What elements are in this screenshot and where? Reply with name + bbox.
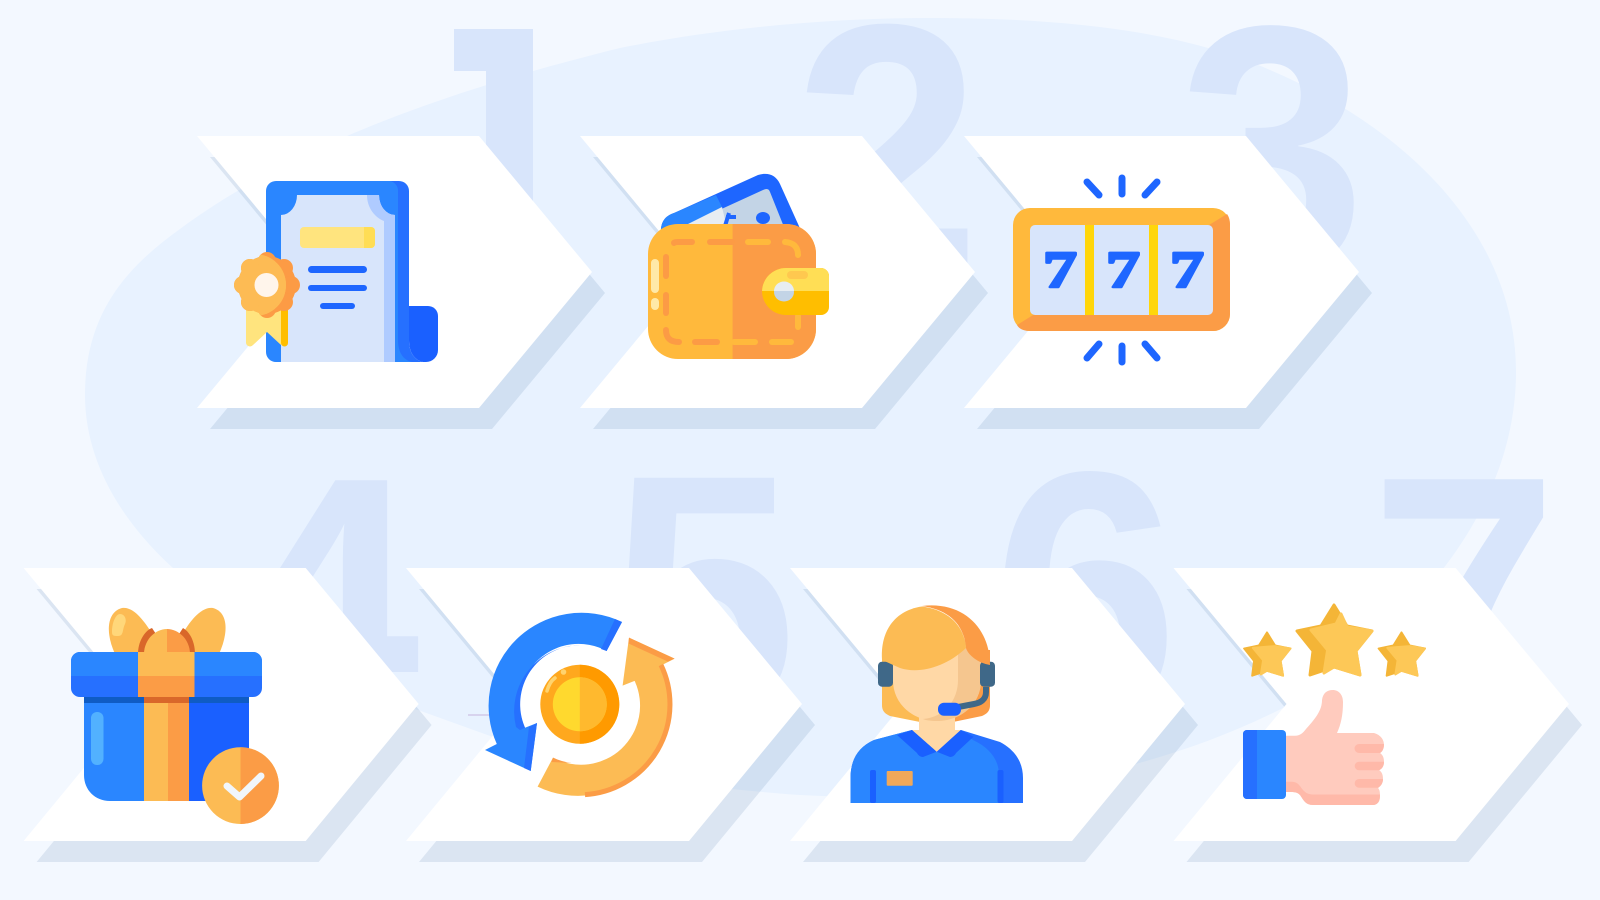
panel: step 6 support agent	[790, 568, 1198, 862]
reel 2: 7	[1106, 242, 1140, 299]
chevron	[580, 136, 975, 408]
panel: step 1 certificate	[197, 136, 605, 429]
chevron shadow	[977, 157, 1372, 429]
icon: certificate	[234, 181, 438, 362]
chevron shadow	[37, 589, 432, 862]
number 1	[454, 29, 533, 200]
chevron	[406, 568, 802, 841]
icon: support agent	[850, 605, 1023, 803]
chevron shadow	[803, 589, 1198, 862]
icon: 777 slot machine	[1013, 178, 1230, 362]
icon: three stars and thumbs up	[1243, 605, 1425, 805]
reel 1: 7	[1043, 242, 1077, 299]
small star right	[1379, 632, 1425, 676]
panel: step 2 wallet	[580, 136, 988, 429]
icon: gift box	[71, 608, 279, 824]
panel: step 7 rating	[1174, 568, 1582, 862]
background blob	[85, 18, 1516, 797]
chevron shadow	[593, 157, 988, 429]
chevron	[24, 568, 419, 841]
panel: step 4 gift	[24, 568, 432, 862]
chevron	[197, 136, 592, 408]
number 4: 4	[232, 405, 422, 795]
chevron	[1174, 568, 1569, 841]
chevron shadow	[419, 589, 815, 862]
panel: step 5 coin cycle	[406, 568, 815, 862]
big star	[1297, 605, 1372, 675]
number 5: 5	[609, 402, 797, 793]
small star left	[1244, 632, 1291, 676]
number 6: 6	[991, 399, 1179, 790]
panel: step 3 slot machine	[964, 136, 1372, 429]
thumbs up hand	[1286, 690, 1384, 805]
chevron shadow	[1186, 589, 1582, 862]
thin line	[468, 714, 498, 716]
number 7: 7	[1370, 404, 1558, 794]
chevron	[964, 136, 1359, 408]
reel 3: 7	[1170, 242, 1204, 299]
chevron	[790, 568, 1185, 841]
icon: coin with cycle arrows	[485, 613, 675, 796]
large step numbers	[232, 0, 1558, 795]
chevron shadow	[210, 157, 605, 429]
icon: wallet	[648, 174, 829, 359]
